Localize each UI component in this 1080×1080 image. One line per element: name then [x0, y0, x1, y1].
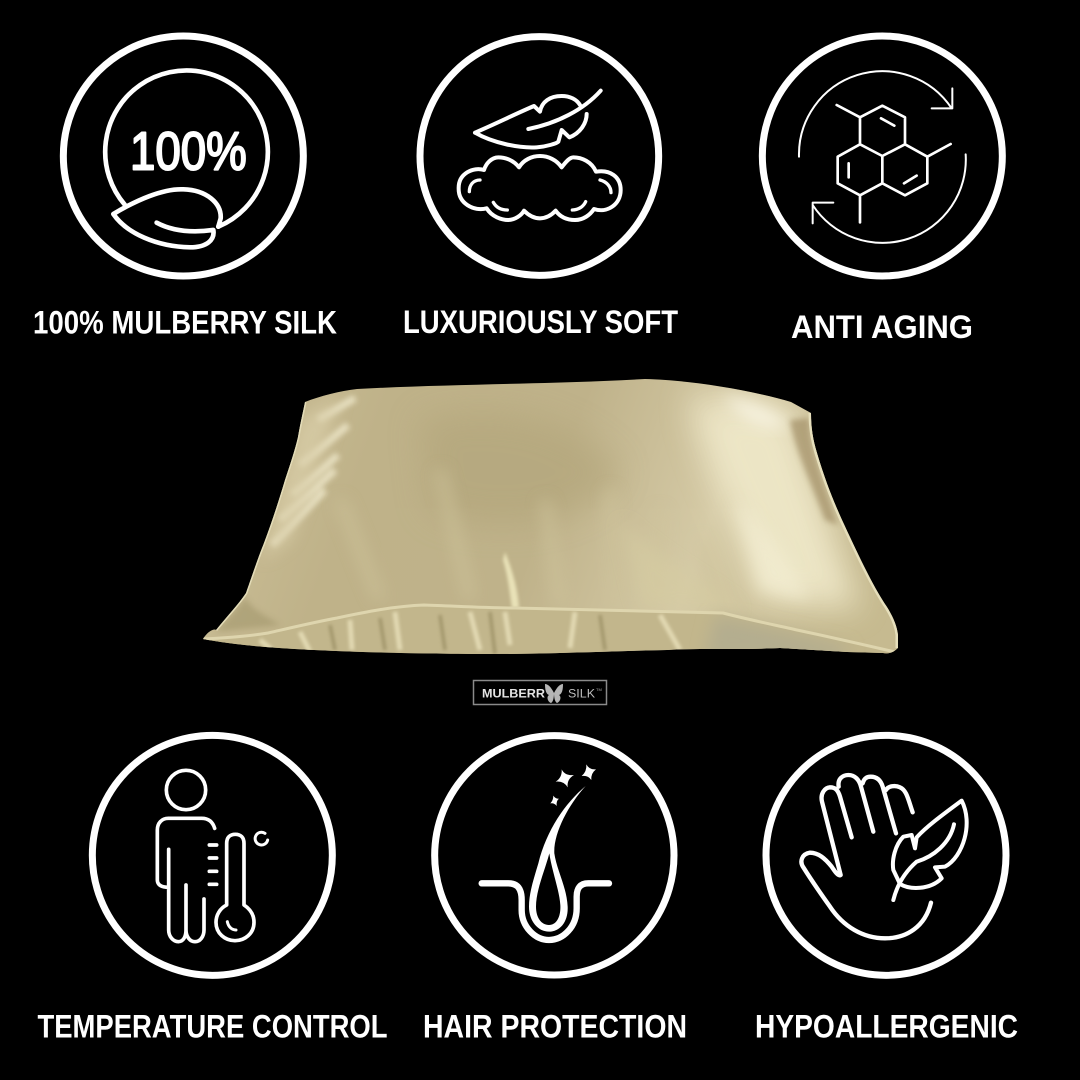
icon: hand with feather: [766, 735, 1006, 975]
heading: anti aging: ANTI AGING: [791, 309, 973, 345]
logo: mulberry silk: SILK: [568, 688, 595, 700]
left satin streaks: [272, 398, 355, 545]
icon: butterfly: [545, 684, 563, 703]
heading: luxuriously soft: LUXURIOUSLY SOFT: [403, 304, 678, 340]
shading beside right seam: [790, 418, 838, 525]
panel: anti aging: [762, 36, 1002, 345]
panel: hypoallergenic: [755, 735, 1018, 1045]
panel: 100% mulberry silk: [33, 36, 337, 340]
heading: temperature control: TEMPERATURE CONTROL: [38, 1009, 388, 1045]
panel: luxuriously soft: [403, 37, 678, 340]
center folds: [440, 478, 547, 512]
heading: hair protection: HAIR PROTECTION: [423, 1009, 687, 1045]
icon: feather above cloud: [420, 37, 659, 275]
icon: molecule with cycle arrows: [762, 36, 1002, 276]
icon: person with thermometer: [92, 735, 332, 975]
heading: hypoallergenic: HYPOALLERGENIC: [755, 1009, 1018, 1045]
heading: 100% mulberry silk: 100% MULBERRY SILK: [33, 304, 337, 340]
logo: mulberry silk: [474, 680, 606, 704]
panel: temperature control: [38, 735, 388, 1045]
seams: [203, 605, 895, 652]
lower flap: [203, 611, 894, 654]
panel: hair protection: [423, 736, 687, 1045]
logo: mulberry silk: MULBERR: [482, 688, 546, 700]
icon: 100% ring with leaf: [63, 36, 303, 276]
icon: hair follicle with sparkles: [435, 736, 674, 975]
product image: silk pillow: [203, 379, 898, 654]
icon: 100% ring with leaf: 100%: [130, 122, 247, 181]
logo: mulberry silk: TM: [596, 687, 602, 692]
